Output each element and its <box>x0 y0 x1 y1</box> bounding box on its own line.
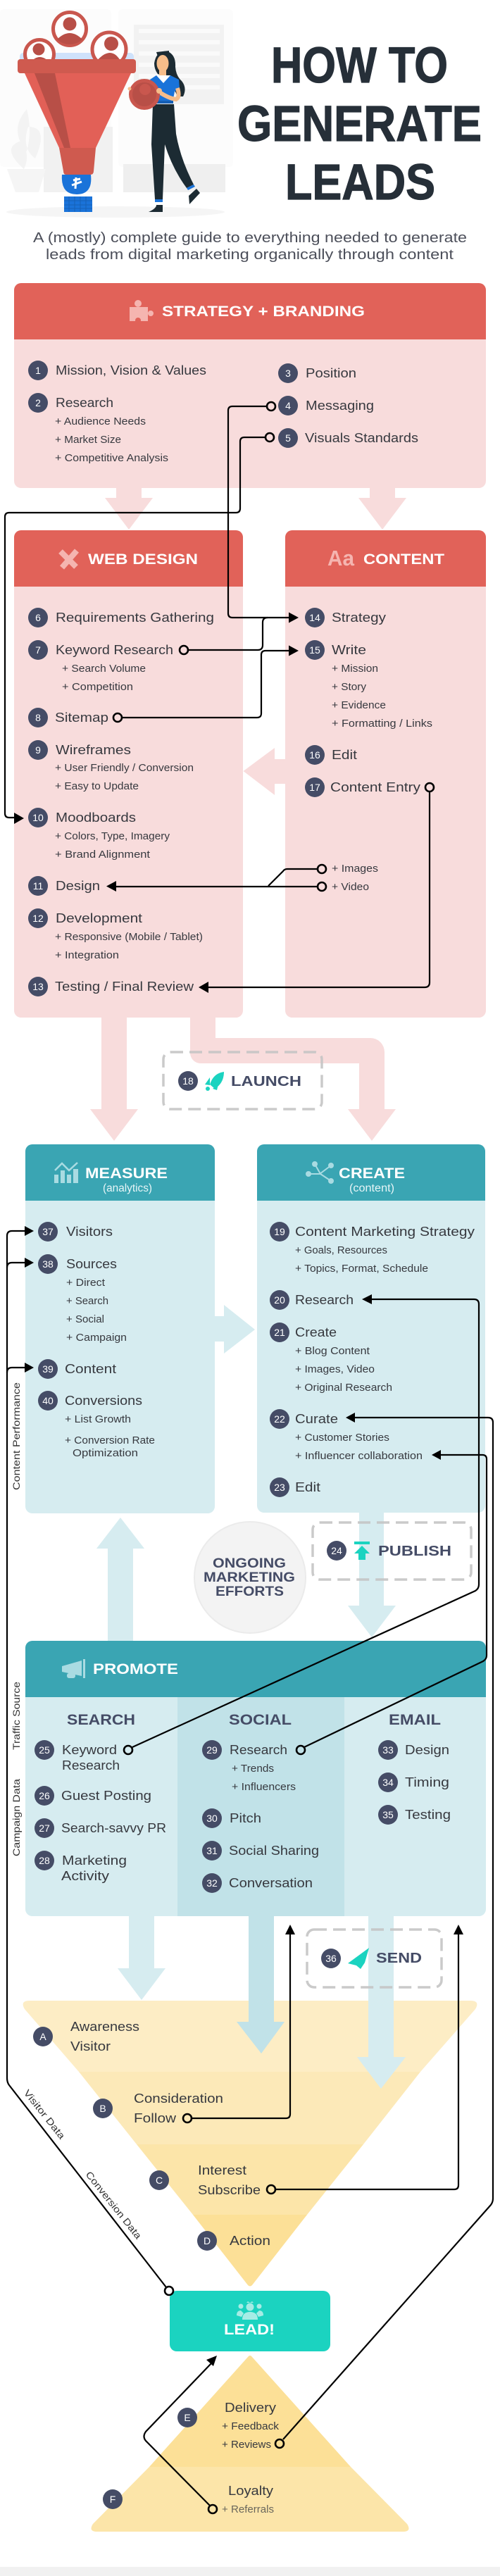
item 19: Content Marketing Strategy <box>295 1224 475 1239</box>
illustration: funnel and woman <box>0 9 233 218</box>
panel: measure <box>25 1144 215 1513</box>
item 5 <box>278 428 418 448</box>
item 9 <box>28 740 194 792</box>
item 11: 11 <box>33 880 43 892</box>
arrow: sitemap to write <box>113 645 299 722</box>
item 38: + Campaign <box>66 1332 127 1344</box>
send box: 36 <box>325 1953 337 1964</box>
stage B <box>93 2091 223 2125</box>
arrow: search to funnel <box>118 1916 165 2000</box>
subtitle <box>33 230 467 263</box>
stage D <box>197 2231 270 2251</box>
item 23 <box>270 1477 320 1497</box>
item 30: Pitch <box>230 1811 261 1825</box>
stage D: Action <box>230 2233 270 2248</box>
item 33: 33 <box>382 1744 394 1756</box>
item 31: 31 <box>206 1845 218 1856</box>
subtitle: leads from digital marketing organically through content <box>46 247 454 263</box>
item 23: Edit <box>295 1480 320 1494</box>
arrow: referrals to lead <box>144 2356 217 2513</box>
stage B: Consideration <box>134 2091 223 2106</box>
launch box <box>163 1052 322 1109</box>
item 29: Research <box>230 1742 287 1757</box>
item 6 <box>28 608 214 627</box>
stage F: + Referrals <box>222 2504 274 2515</box>
item 15: + Formatting / Links <box>332 718 432 730</box>
arrow: social research to influencer collaboration <box>296 1450 487 1754</box>
stage A: Visitor <box>70 2039 111 2053</box>
arrow: promote to measure <box>96 1518 144 1641</box>
item 20: 20 <box>274 1294 285 1306</box>
stage A <box>33 2019 139 2053</box>
stage C: C <box>156 2175 163 2186</box>
item 35: 35 <box>382 1809 394 1820</box>
heading: email: EMAIL <box>389 1712 441 1728</box>
item 7: 7 <box>35 644 41 656</box>
arrow: subscribe to email <box>267 1925 463 2194</box>
item 9: 9 <box>35 744 41 756</box>
item 40: Optimization <box>73 1448 138 1459</box>
item 1 <box>28 361 206 380</box>
heading: social: SOCIAL <box>229 1712 292 1728</box>
stage E: Delivery <box>225 2400 277 2415</box>
heading: web design: WEB DESIGN <box>88 551 198 568</box>
item 17 <box>305 777 421 893</box>
label: traffic source: Traffic Source <box>11 1682 22 1750</box>
publish box <box>313 1523 471 1580</box>
stage D: D <box>204 2235 211 2246</box>
item 12: + Responsive (Mobile / Tablet) <box>55 932 203 943</box>
stage E <box>177 2400 280 2451</box>
item 34: 34 <box>382 1777 394 1788</box>
publish box: PUBLISH <box>378 1544 451 1559</box>
arrow: strategy to web design <box>105 488 153 530</box>
item 1: Mission, Vision & Values <box>56 363 206 377</box>
subtitle: A (mostly) complete guide to everything needed to generate <box>33 230 467 246</box>
item 32: 32 <box>206 1877 218 1889</box>
funnel: stages <box>23 2001 477 2286</box>
panel: create <box>257 1144 485 1513</box>
item 15: Write <box>332 642 366 657</box>
item 22: + Influencer collaboration <box>295 1451 423 1462</box>
item 8 <box>28 708 108 727</box>
item 9: Wireframes <box>56 742 131 757</box>
item 33 <box>378 1740 449 1760</box>
item 6: Requirements Gathering <box>56 610 214 625</box>
item 38: + Direct <box>66 1277 105 1289</box>
item 16 <box>305 745 357 765</box>
icon: chart <box>54 1163 78 1183</box>
item 35: Testing <box>405 1807 451 1822</box>
stage B: Follow <box>134 2111 177 2125</box>
subheading: analytics: (analytics) <box>103 1182 152 1194</box>
item 23: 23 <box>274 1482 285 1493</box>
item 37 <box>38 1222 113 1242</box>
item 34: Timing <box>405 1775 449 1789</box>
arrow: messaging to strategy <box>228 402 299 623</box>
panel: content <box>285 530 486 1018</box>
send box: SEND <box>376 1951 422 1966</box>
item 19: 19 <box>274 1226 285 1237</box>
item 21: 21 <box>274 1327 285 1338</box>
item 12: 12 <box>32 913 44 924</box>
title: LEADS <box>285 155 435 211</box>
item 8: 8 <box>35 712 41 723</box>
item 22: 22 <box>274 1413 285 1425</box>
item 6: 6 <box>35 612 41 623</box>
stage C: Interest <box>198 2163 246 2177</box>
item 28 <box>35 1851 127 1883</box>
arrow: web design to measure <box>90 1018 138 1141</box>
item 10: 10 <box>32 812 44 823</box>
item 14: Strategy <box>332 610 387 625</box>
item 27: 27 <box>39 1822 50 1834</box>
stage F <box>103 2483 274 2515</box>
item 19 <box>270 1222 475 1275</box>
launch box: LAUNCH <box>231 1074 301 1089</box>
stage F: F <box>110 2494 115 2505</box>
item 14: 14 <box>309 612 320 623</box>
item 21: Create <box>295 1325 337 1339</box>
item 38: + Social <box>66 1314 104 1325</box>
item 31: Social Sharing <box>229 1843 319 1858</box>
stage E: + Reviews <box>222 2439 271 2451</box>
item 26: 26 <box>39 1790 50 1801</box>
item 39: 39 <box>42 1363 54 1375</box>
item 38 <box>38 1254 127 1344</box>
item 40: Conversions <box>65 1393 142 1408</box>
item 5: 5 <box>285 432 291 444</box>
arrow: images and video to design <box>106 865 326 892</box>
item 32: Conversation <box>229 1875 313 1890</box>
item 25 <box>35 1740 120 1772</box>
item 40: + List Growth <box>65 1414 131 1425</box>
item 20: Research <box>295 1292 354 1307</box>
arrow: visuals standards to moodboards <box>5 433 274 824</box>
item 25: 25 <box>39 1744 50 1756</box>
icon: Aa: Aa <box>327 546 355 570</box>
arrow: create to promote <box>348 1513 396 1637</box>
item 2: + Competitive Analysis <box>55 453 168 464</box>
item 2: + Audience Needs <box>55 416 146 427</box>
stage A: A <box>39 2031 46 2042</box>
item 37: 37 <box>42 1226 54 1237</box>
icon: network <box>306 1162 333 1183</box>
item 16: 16 <box>309 749 320 761</box>
item 15 <box>305 640 432 730</box>
item 7: Keyword Research <box>56 642 173 657</box>
item 27: Search-savvy PR <box>61 1820 166 1835</box>
item 10: + Colors, Type, Imagery <box>55 831 170 842</box>
item 4: 4 <box>285 400 291 411</box>
item 10 <box>28 808 170 861</box>
publish box: 24 <box>331 1545 342 1556</box>
panel: web design <box>14 530 243 1018</box>
item 10: + Brand Alignment <box>55 849 150 861</box>
item 1: 1 <box>35 365 41 376</box>
item 21: + Blog Content <box>295 1346 370 1357</box>
stage F: Loyalty <box>228 2483 274 2498</box>
item 29 <box>202 1740 296 1793</box>
callout: ongoing marketing efforts: MARKETING <box>204 1570 295 1585</box>
panel: promote <box>25 1641 486 1916</box>
item 40 <box>38 1391 155 1459</box>
arrow: keyword research to research <box>124 1294 479 1754</box>
arrow: email to funnel <box>357 1916 406 2089</box>
item 11 <box>28 876 100 896</box>
item 12: + Integration <box>55 950 119 961</box>
item 12: Development <box>56 911 142 925</box>
label: campaign data: Campaign Data <box>11 1778 22 1856</box>
item 7 <box>28 640 173 693</box>
heading: promote: PROMOTE <box>93 1661 178 1677</box>
item 21 <box>270 1323 392 1394</box>
icon: rocket <box>205 1072 224 1091</box>
item 21: + Original Research <box>295 1382 392 1394</box>
callout: ongoing marketing efforts: ONGOING <box>213 1556 286 1571</box>
label: lead: LEAD! <box>224 2322 275 2338</box>
item 29: + Trends <box>232 1763 274 1775</box>
title <box>237 38 482 211</box>
item 27 <box>35 1818 166 1838</box>
item 14 <box>305 608 387 627</box>
item 3 <box>278 363 356 383</box>
item 25: Keyword <box>62 1742 117 1757</box>
item 39 <box>38 1359 116 1379</box>
item 19: + Goals, Resources <box>295 1245 387 1256</box>
item 15: 15 <box>309 644 320 656</box>
item 37: Visitors <box>66 1224 113 1239</box>
item 38: Sources <box>66 1256 117 1271</box>
item 35 <box>378 1805 451 1825</box>
item 4 <box>278 396 374 415</box>
item 2: Research <box>56 395 113 410</box>
item 13 <box>28 977 194 996</box>
item 17: 17 <box>309 782 320 793</box>
item 28: 28 <box>39 1855 50 1866</box>
item 33: Design <box>405 1742 449 1757</box>
item 19: + Topics, Format, Schedule <box>295 1263 428 1275</box>
icon: paper plane <box>348 1948 369 1969</box>
stage E: E <box>184 2412 191 2423</box>
item 28: Marketing <box>62 1853 127 1868</box>
item 21: + Images, Video <box>295 1364 375 1375</box>
arrow: lead data to measure <box>7 1226 173 2295</box>
funnel labels <box>33 2019 270 2251</box>
stage C <box>149 2163 261 2197</box>
item 2: 2 <box>35 397 41 408</box>
arrow: strategy to content <box>358 488 406 530</box>
title: HOW TO <box>271 38 448 94</box>
item 32 <box>202 1873 313 1893</box>
item 38: + Search <box>66 1296 108 1307</box>
item 15: + Mission <box>332 663 378 675</box>
item 38: 38 <box>42 1258 54 1270</box>
send box <box>307 1930 442 1987</box>
label: conversion data: Conversion Data <box>84 2170 144 2242</box>
pyramid: post-lead stages <box>92 2356 408 2532</box>
footer strip <box>0 2567 500 2576</box>
item 17: Content Entry <box>330 780 421 794</box>
arrow: measure to create <box>215 1305 255 1353</box>
label: visitor data: Visitor Data <box>22 2088 68 2142</box>
item 7: + Search Volume <box>62 663 146 675</box>
item 12 <box>28 908 203 961</box>
heading: strategy + branding: STRATEGY + BRANDING <box>162 304 365 320</box>
icon: pencil and ruler <box>61 551 77 568</box>
icon: people <box>237 2301 263 2320</box>
item 26: Guest Posting <box>61 1788 151 1803</box>
item 9: + User Friendly / Conversion <box>55 763 194 774</box>
item 34 <box>378 1772 449 1792</box>
item 17: + Images <box>332 863 378 875</box>
item 29: 29 <box>206 1744 218 1756</box>
item 30 <box>202 1808 261 1828</box>
item 13: Testing / Final Review <box>55 979 194 994</box>
item 5: Visuals Standards <box>305 430 418 445</box>
item 22 <box>270 1409 423 1462</box>
item 20 <box>270 1290 354 1310</box>
item 11: Design <box>56 878 100 893</box>
item 22: Curate <box>295 1411 338 1426</box>
arrow: reviews to curate <box>275 1413 493 2448</box>
item 7: + Competition <box>62 682 133 693</box>
item 31 <box>202 1841 319 1861</box>
heading: measure: MEASURE <box>85 1165 168 1182</box>
icon: publish arrow <box>354 1542 370 1560</box>
arrow: content to web design <box>244 748 285 795</box>
item 13: 13 <box>32 981 44 992</box>
item 16: Edit <box>332 747 357 762</box>
heading: search: SEARCH <box>67 1712 135 1728</box>
label: content performance: Content Performance <box>11 1382 22 1490</box>
item 26 <box>35 1786 151 1806</box>
arrow: social to funnel <box>237 1916 285 2053</box>
launch box: 18 <box>182 1075 194 1087</box>
item 8: Sitemap <box>55 710 108 725</box>
callout: ongoing marketing efforts <box>194 1522 306 1633</box>
callout: ongoing marketing efforts: EFFORTS <box>215 1584 284 1599</box>
heading: content: CONTENT <box>363 551 444 568</box>
stage A: Awareness <box>70 2019 139 2034</box>
icon: megaphone <box>62 1659 85 1678</box>
item 40: 40 <box>42 1395 54 1406</box>
arrow: content entry to testing <box>199 783 434 993</box>
item 10: Moodboards <box>56 810 136 825</box>
lead box <box>170 2291 330 2351</box>
item 28: Activity <box>61 1868 110 1883</box>
item 2: + Market Size <box>55 434 121 446</box>
stage E: + Feedback <box>222 2421 280 2432</box>
panel: strategy + branding <box>14 283 486 488</box>
arrow: follow to social <box>183 1925 295 2122</box>
item 2 <box>28 393 168 464</box>
item 15: + Story <box>332 682 367 693</box>
item 9: + Easy to Update <box>55 781 139 792</box>
icon: puzzle piece <box>130 300 154 323</box>
arrow: keyword research to strategy <box>180 618 268 654</box>
arrow: web design to create <box>190 1018 396 1141</box>
item 25: Research <box>62 1758 120 1772</box>
item 30: 30 <box>206 1813 218 1824</box>
item 15: + Evidence <box>332 700 386 711</box>
item 29: + Influencers <box>232 1782 296 1793</box>
heading: create: CREATE <box>339 1165 405 1182</box>
stage C: Subscribe <box>198 2182 261 2197</box>
subheading: content: (content) <box>349 1182 394 1194</box>
stage B: B <box>99 2103 106 2114</box>
item 3: 3 <box>285 368 291 379</box>
item 39: Content <box>65 1361 116 1376</box>
item 4: Messaging <box>306 398 374 413</box>
item 3: Position <box>306 365 356 380</box>
item 22: + Customer Stories <box>295 1432 389 1444</box>
item 40: + Conversion Rate <box>65 1435 155 1446</box>
item 17: + Video <box>332 882 369 893</box>
